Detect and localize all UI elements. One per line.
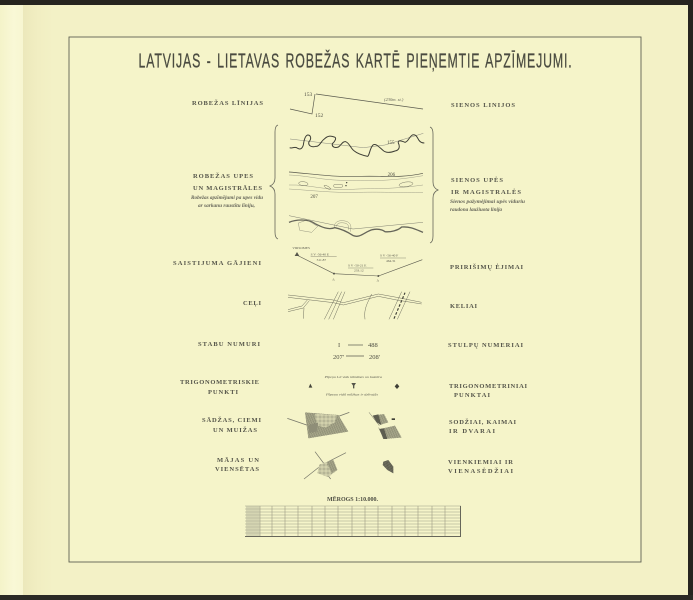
traverse line symbol: S V -56-40 E <box>311 252 329 256</box>
label: Mājas un viensētas: MĀJAS UN <box>217 457 259 464</box>
trigonometric point symbols <box>309 375 399 396</box>
traverse line symbol: VIRSOMES <box>292 246 310 250</box>
label: Sādžas, ciemi un muižas <box>202 416 261 434</box>
label: Trigonometriniai punktai: PUNKTAI <box>454 392 490 399</box>
row: boundary lines <box>192 92 515 119</box>
label: Trigonometriniai punktai <box>449 383 527 399</box>
traverse line symbol: 311.87 <box>317 258 326 262</box>
boundary line symbol: (230m. st.) <box>384 97 404 102</box>
traverse line symbol: 464.31 <box>386 259 396 263</box>
row: traverse lines <box>173 246 523 283</box>
right brace <box>430 127 438 243</box>
map legend frame <box>69 37 641 562</box>
label: Trigonometriskie punkti <box>180 379 259 396</box>
river with islands: 207 <box>310 195 318 200</box>
row: border rivers and canals <box>191 125 525 243</box>
label: Sodžiai, kaimai ir dvarai: SODŽIAI, KAIMAI <box>449 418 516 426</box>
label block: Robežas upes un magistrāles: ROBEŽAS UPES <box>193 172 253 180</box>
row: houses and farmsteads <box>215 452 513 479</box>
label: Mājas un viensētas: VIENSĒTAS <box>215 466 259 473</box>
label: Sādžas, ciemi un muižas: UN MUIŽAS <box>213 426 257 434</box>
boundary line symbol <box>290 92 423 119</box>
label: Sodžiai, kaimai ir dvarai: IR DVARAI <box>449 428 495 435</box>
scale heading: MĒROGS 1:10.000. <box>327 496 378 503</box>
road symbols <box>288 292 422 319</box>
row: villages <box>202 412 516 439</box>
trigonometric point symbols: Pīpeņu vidū mūžkas ir dzīvojās <box>325 392 379 396</box>
label: Trigonometriskie punkti: PUNKTI <box>208 389 238 396</box>
label: Stabu numuri: STABU NUMURI <box>198 341 260 348</box>
trigonometric point symbols: Pīpeņu I-ii vidu kūmānes un baznīca <box>323 375 382 379</box>
traverse line symbol: 233.12 <box>354 269 364 273</box>
post number symbol: 488 <box>368 342 378 349</box>
label: Sienos linijos: SIENOS LINIJOS <box>451 102 515 109</box>
label block: Sienos upės ir magistralės: IR MAGISTRALĖS <box>451 189 521 196</box>
post number symbol: I <box>338 342 340 349</box>
river with canal double line <box>289 216 423 236</box>
label block: Robežas upes un magistrāles: UN MAGISTRĀLES <box>193 185 262 192</box>
label block: Robežas upes un magistrāles: Robežas apzīmējumi pa upes vidu <box>191 195 263 201</box>
label: Trigonometriniai punktai: TRIGONOMETRINIAI <box>449 383 527 390</box>
row: roads <box>243 292 477 319</box>
post number symbol: 207' <box>333 354 344 361</box>
label: Saistijuma gājieni: SAISTIJUMA GĀJIENI <box>173 260 261 267</box>
label: Sodžiai, kaimai ir dvarai <box>449 418 516 435</box>
label: Pririšimų ėjimai: PRIRIŠIMŲ ĖJIMAI <box>450 263 523 271</box>
label: Stulpų numeriai: STULPŲ NUMERIAI <box>448 342 523 349</box>
traverse line symbol: Δ <box>377 279 380 283</box>
label block: Sienos upės ir magistralės: raudona laužiuota linija <box>450 207 502 213</box>
boundary line symbol: 152 <box>315 113 324 119</box>
river with thick meander: 155 <box>387 141 395 146</box>
label: Sādžas, ciemi un muižas: SĀDŽAS, CIEMI <box>202 416 261 424</box>
label block: Robežas upes un magistrāles: ar sarkanu raustītu līniju, <box>198 203 255 209</box>
scale bar <box>245 496 461 537</box>
label: Mājas un viensētas <box>215 457 259 473</box>
label: Vienkiemiai ir vienasėdžiai: VIENASĖDŽIAI <box>448 467 513 475</box>
row: post numbers <box>198 341 523 361</box>
label: Keliai: KELIAI <box>450 303 477 310</box>
label: Vienkiemiai ir vienasėdžiai: VIENKIEMIAI IR <box>448 459 513 466</box>
farmstead symbols <box>304 452 393 479</box>
river with islands: 206 <box>388 173 396 178</box>
row: trigonometric points <box>180 375 527 399</box>
label block: Sienos upės ir magistralės <box>450 177 525 213</box>
label: Ceļi: CEĻI <box>243 300 261 307</box>
label block: Sienos upės ir magistralės: Sienos pažymėjimai upės viduriu <box>450 199 525 205</box>
label: Trigonometriskie punkti: TRIGONOMETRISKIE <box>180 379 259 386</box>
label: Vienkiemiai ir vienasėdžiai <box>448 459 513 475</box>
traverse line symbol: Δ <box>332 278 335 282</box>
river with islands <box>289 172 423 200</box>
traverse line symbol <box>292 246 422 283</box>
scale grid <box>245 506 461 537</box>
label block: Sienos upės ir magistralės: SIENOS UPĖS <box>451 177 503 184</box>
traverse line symbol: S V -56-40 F <box>380 254 398 258</box>
post number symbol: 208' <box>369 354 380 361</box>
left brace <box>270 125 278 239</box>
village symbols <box>287 412 402 439</box>
label block: Robežas upes un magistrāles <box>191 172 263 209</box>
boundary line symbol: 153 <box>304 92 312 98</box>
label: Robežas līnijas: ROBEŽAS LĪNIJAS <box>192 99 263 107</box>
post number symbol <box>333 342 380 361</box>
traverse line symbol: S V -50-21 E <box>348 264 366 268</box>
river symbols <box>289 133 424 236</box>
